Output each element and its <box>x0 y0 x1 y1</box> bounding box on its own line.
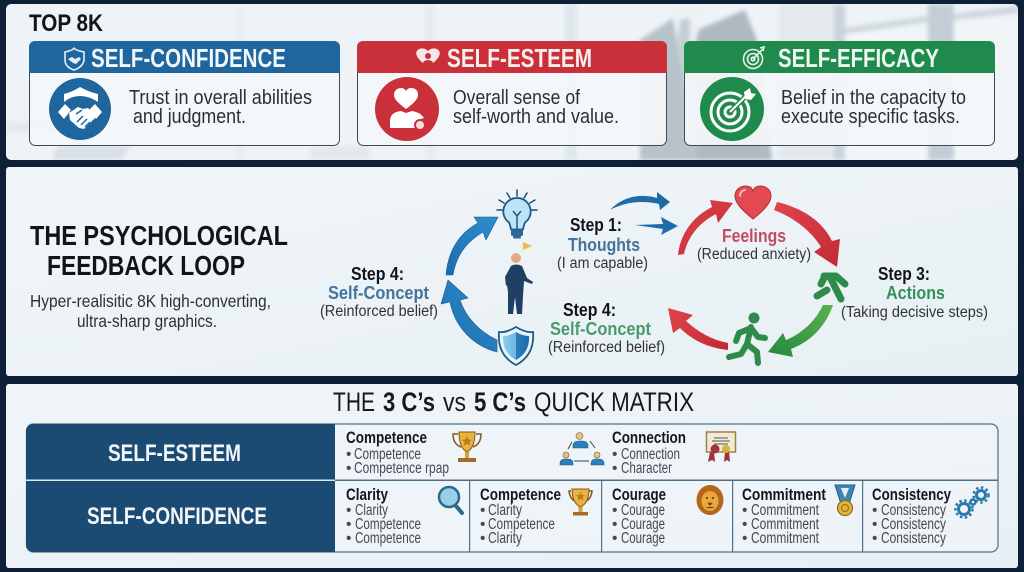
cell: confidence competence: Clarity <box>488 502 522 519</box>
cell: confidence courage: • <box>612 502 617 519</box>
icon: handshake circle <box>49 78 111 140</box>
cell: confidence commitment: Commitment <box>751 502 820 519</box>
icon: medal <box>835 485 855 516</box>
card: self-efficacy <box>684 41 995 146</box>
label: step 4 self-concept middle: Self-Concept <box>550 318 651 339</box>
text: self-confidence description: Trust in overall abilities <box>129 87 312 109</box>
cell: confidence consistency: Consistency <box>881 516 946 533</box>
cell: confidence competence <box>480 485 561 547</box>
matrix table <box>26 424 998 552</box>
arrow: red arc to actions <box>774 202 840 267</box>
icon: heart person small <box>416 48 440 69</box>
cell: confidence competence: • <box>480 502 485 519</box>
label: feelings: Feelings <box>722 225 786 246</box>
icon: shield handshake small <box>65 48 84 70</box>
heading: self-efficacy: SELF-EFFICACY <box>778 43 939 73</box>
text: self-efficacy description: execute specific tasks. <box>781 106 960 128</box>
cell: confidence commitment: Commitment <box>742 485 826 504</box>
arrow: red arc to self-concept <box>668 308 728 350</box>
text: self-esteem description: self-worth and value. <box>453 106 619 128</box>
icon: green runner lower <box>729 312 765 363</box>
heading: the psychological feedback loop: THE PSYCHOLOGICAL <box>30 220 288 251</box>
cell: confidence courage: Courage <box>621 502 665 519</box>
text: self-efficacy description <box>781 87 966 128</box>
cell: confidence commitment: • <box>742 516 747 533</box>
heading: the psychological feedback loop: FEEDBACK LOOP <box>47 250 245 281</box>
cell: confidence consistency <box>872 485 951 547</box>
card: self-esteem <box>357 41 667 146</box>
icon: shield <box>499 327 533 365</box>
arrow: blue arc up to bulb <box>446 217 498 275</box>
icon: certificate <box>706 432 736 462</box>
heading: self-esteem: SELF-ESTEEM <box>447 43 592 73</box>
icon: gears <box>956 488 988 518</box>
icon: magnifier <box>439 487 462 513</box>
icon: lion <box>696 485 724 515</box>
text: self-confidence description: and judgment. <box>133 106 246 128</box>
title: the 3 C's vs 5 C's quick matrix <box>333 387 694 417</box>
label: step 3 actions: Actions <box>886 282 945 303</box>
cell: confidence courage: Courage <box>612 485 666 504</box>
text: self-esteem description: Overall sense of <box>453 87 580 109</box>
cell: confidence clarity: Clarity <box>355 502 388 519</box>
arrow: green arc to runner <box>768 305 833 357</box>
icon: heart person circle <box>375 77 439 141</box>
text: subtitle <box>30 291 271 331</box>
cell: confidence consistency: Consistency <box>872 485 951 504</box>
text: self-efficacy description: Belief in the capacity to <box>781 87 966 109</box>
cell: confidence competence: • <box>480 516 485 533</box>
label: step 4 self-concept middle <box>548 300 665 356</box>
label: step 4 self-concept left: Self-Concept <box>328 282 429 303</box>
cell: esteem competence <box>346 428 449 477</box>
panel background: blurred office photo <box>6 4 1018 160</box>
panel: psychological feedback loop <box>6 167 1018 376</box>
text: self-esteem description <box>453 87 619 128</box>
label: step 3 actions: Step 3: <box>878 264 930 284</box>
title: the 3 C's vs 5 C's quick matrix: vs <box>443 387 466 417</box>
cell: esteem competence: • <box>346 446 351 463</box>
icon: target circle <box>700 77 764 141</box>
cell: esteem competence: Competence <box>354 446 421 463</box>
cell: esteem competence: Competence <box>346 428 427 447</box>
text: subtitle: Hyper-realisitic 8K high-converting, <box>30 291 271 311</box>
icon: heart <box>735 186 771 219</box>
cell: confidence clarity: Clarity <box>346 485 388 504</box>
cell: confidence commitment: • <box>742 530 747 547</box>
arrow: blue curved to feelings <box>610 192 670 210</box>
cell: confidence courage: • <box>612 530 617 547</box>
cell: confidence clarity: Competence <box>355 530 421 547</box>
cell: confidence competence: Clarity <box>488 530 522 547</box>
panel: top 8K <box>6 4 1018 160</box>
row labels: navy column <box>26 424 335 552</box>
cell: confidence commitment: • <box>742 502 747 519</box>
cell: confidence consistency: Consistency <box>881 530 946 547</box>
cell: confidence commitment <box>742 485 826 547</box>
label: step 3 actions <box>841 264 988 321</box>
cell: esteem connection: • <box>612 446 617 463</box>
label: step 4 self-concept middle: Step 4: <box>563 300 616 320</box>
title: the 3 C's vs 5 C's quick matrix: THE <box>333 387 375 417</box>
row labels: navy column: SELF-CONFIDENCE <box>87 503 267 530</box>
icon: light bulb <box>497 190 537 238</box>
label: step 1 thoughts: (I am capable) <box>557 255 648 272</box>
icon: person with flag <box>505 242 533 314</box>
cell: confidence courage: Courage <box>621 530 665 547</box>
label: step 1 thoughts: Thoughts <box>568 234 640 255</box>
cell: confidence competence: • <box>480 530 485 547</box>
cell: confidence consistency: Consistency <box>881 502 946 519</box>
cell: confidence consistency: • <box>872 502 877 519</box>
icon: trophy confidence <box>569 489 592 516</box>
label: step 4 self-concept left: Step 4: <box>351 264 404 284</box>
arrow: red arc to heart <box>678 200 733 255</box>
label: step 3 actions: (Taking decisive steps) <box>841 304 988 321</box>
cell: confidence consistency: • <box>872 530 877 547</box>
cell: esteem competence: • <box>346 460 351 477</box>
title: TOP 8K: TOP 8K <box>29 10 104 37</box>
cell: esteem connection: • <box>612 460 617 477</box>
cell: confidence consistency: • <box>872 516 877 533</box>
panel: quick matrix <box>6 384 1018 568</box>
icon: green runner upper <box>817 276 845 299</box>
label: feelings: (Reduced anxiety) <box>697 246 811 263</box>
arrow: blue arc up from shield <box>441 280 497 352</box>
cell: esteem competence: Competence rpap <box>354 460 449 477</box>
label: step 4 self-concept left: (Reinforced belief) <box>320 303 438 320</box>
cell: esteem connection: Character <box>621 460 672 477</box>
card: self-confidence <box>29 41 340 146</box>
cell: confidence competence: Competence <box>480 485 561 504</box>
row labels: navy column: SELF-ESTEEM <box>108 440 241 467</box>
heading: the psychological feedback loop <box>30 220 288 281</box>
cell: confidence clarity: • <box>346 502 351 519</box>
cell: esteem connection: Connection <box>612 428 686 447</box>
label: step 4 self-concept middle: (Reinforced belief) <box>548 339 665 356</box>
cell: esteem connection <box>612 428 686 477</box>
label: feelings <box>697 225 811 263</box>
title: the 3 C's vs 5 C's quick matrix: 3 C’s <box>383 387 435 417</box>
cell: confidence courage <box>612 485 666 547</box>
cell: confidence courage: • <box>612 516 617 533</box>
cell: confidence clarity: • <box>346 516 351 533</box>
icon: trophy esteem <box>453 432 481 462</box>
text: self-confidence description <box>129 87 312 128</box>
cell: confidence competence: Competence <box>488 516 555 533</box>
icon: target small <box>744 47 764 68</box>
label: step 1 thoughts <box>557 215 648 272</box>
cell: confidence clarity: Competence <box>355 516 421 533</box>
heading: self-confidence: SELF-CONFIDENCE <box>91 43 286 73</box>
text: subtitle: ultra-sharp graphics. <box>77 311 217 331</box>
cell: confidence commitment: Commitment <box>751 516 820 533</box>
title: the 3 C's vs 5 C's quick matrix: QUICK MATRIX <box>534 387 694 417</box>
label: step 4 self-concept left <box>320 264 438 320</box>
cell: esteem connection: Connection <box>621 446 680 463</box>
icon: network of people <box>560 432 604 465</box>
label: step 1 thoughts: Step 1: <box>570 215 622 235</box>
title: the 3 C's vs 5 C's quick matrix: 5 C’s <box>474 387 526 417</box>
cell: confidence clarity <box>346 485 421 547</box>
cell: confidence commitment: Commitment <box>751 530 820 547</box>
arrow: blue straight to feelings <box>635 217 678 235</box>
cell: confidence clarity: • <box>346 530 351 547</box>
cell: confidence courage: Courage <box>621 516 665 533</box>
